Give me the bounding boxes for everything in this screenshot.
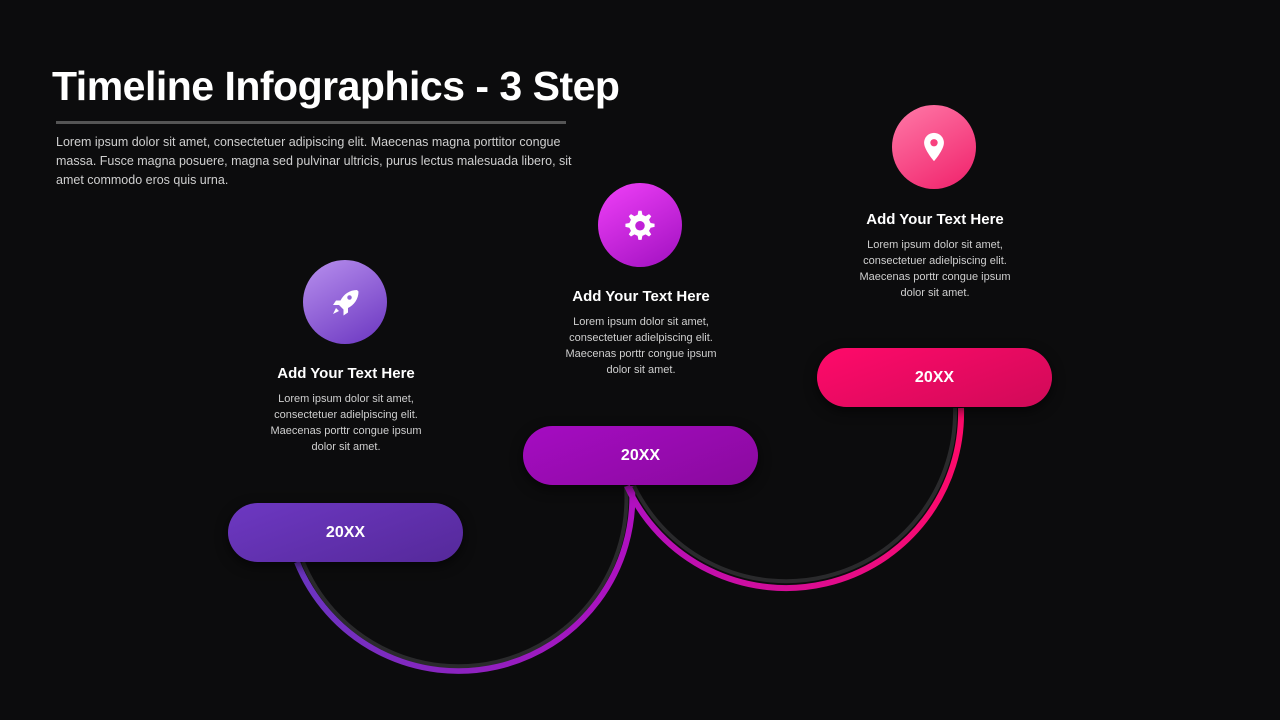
text block: step 1: Lorem ipsum dolor sit amet, <box>278 393 414 405</box>
text block: step 2: Lorem ipsum dolor sit amet, <box>573 316 709 328</box>
pill: step 2 <box>523 426 758 485</box>
pill: step 1 <box>228 503 463 562</box>
intro text: Lorem ipsum dolor sit amet, consectetuer adipiscing elit. Maecenas magna porttitor congue massa. Fusce magna posuere, magna sed pulvinar ultricis, purus lectus malesuada libero, sit amet commodo eros quis urna. <box>56 135 572 187</box>
text block: step 3: consectetuer adielpiscing elit. <box>863 255 1007 267</box>
text block: step 2: consectetuer adielpiscing elit. <box>569 332 713 344</box>
icon: rocket <box>303 260 387 344</box>
text block: step 1: dolor sit amet. <box>311 441 381 453</box>
text block: step 2 <box>565 288 717 376</box>
pill: step 1: 20XX <box>326 524 365 540</box>
text block: step 3 <box>859 211 1011 299</box>
text block: step 1: Maecenas porttr congue ipsum <box>270 425 422 437</box>
text block: step 1: consectetuer adielpiscing elit. <box>274 409 418 421</box>
title: Timeline Infographics - 3 Step <box>52 63 619 109</box>
text block: step 1: Add Your Text Here <box>277 365 415 382</box>
pill: step 3: 20XX <box>915 368 954 386</box>
text block: step 3: dolor sit amet. <box>900 287 970 299</box>
pill: step 3 <box>817 348 1052 407</box>
icon: location pin <box>892 105 976 189</box>
text block: step 2: Maecenas porttr congue ipsum <box>565 348 717 360</box>
text block: step 3: Maecenas porttr congue ipsum <box>859 271 1011 283</box>
text block: step 3: Add Your Text Here <box>866 211 1004 228</box>
text block: step 3: Lorem ipsum dolor sit amet, <box>867 239 1003 251</box>
pill: step 2: 20XX <box>621 446 660 464</box>
text block: step 2: dolor sit amet. <box>606 364 676 376</box>
icon: gear <box>598 183 682 267</box>
text block: step 2: Add Your Text Here <box>572 288 710 305</box>
text block: step 1 <box>270 365 422 453</box>
